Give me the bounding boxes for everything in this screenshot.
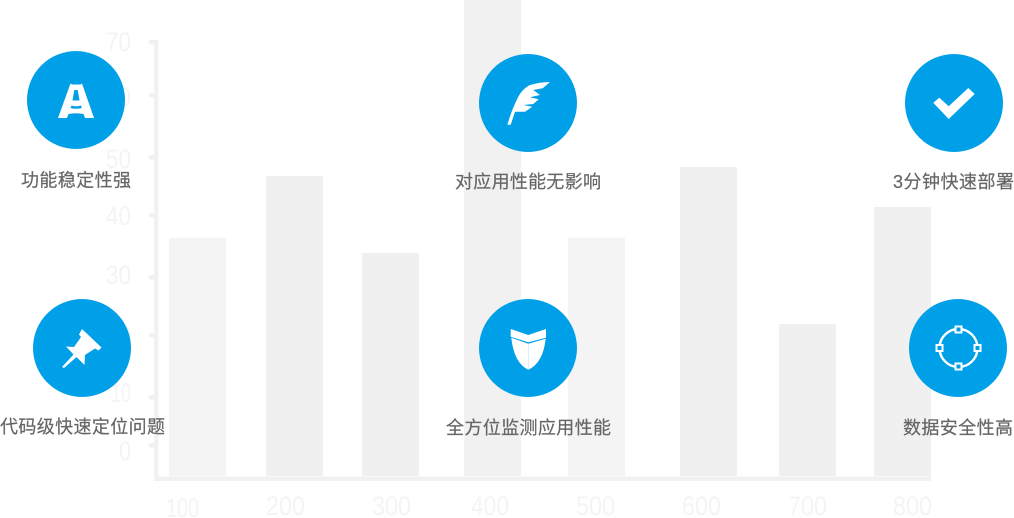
label: 代码级快速定位问题	[0, 417, 165, 437]
y axis labels	[106, 27, 131, 466]
y axis labels: 40	[106, 201, 131, 231]
y axis labels: 10	[111, 378, 131, 408]
label: 3分钟快速部署	[893, 172, 1014, 192]
y axis labels: 60	[106, 82, 131, 112]
icon: push pin	[33, 299, 131, 397]
y axis labels: 70	[106, 27, 131, 57]
icon: circle nodes	[909, 299, 1007, 397]
label: 功能稳定性强	[21, 170, 131, 190]
icon: shield	[479, 299, 577, 397]
icon: check mark	[905, 54, 1003, 152]
y axis labels: 20	[106, 320, 131, 350]
y axis labels: 50	[106, 144, 131, 174]
icon: feather	[479, 54, 577, 152]
label: 全方位监测应用性能	[446, 418, 611, 438]
icon: tower letter A	[27, 51, 125, 149]
feature: data security	[903, 299, 1013, 438]
feature: fast deployment	[893, 54, 1014, 192]
feature: full monitoring	[446, 299, 611, 438]
feature: code-level diagnosis	[0, 299, 165, 437]
label: 对应用性能无影响	[455, 172, 601, 192]
bars	[169, 0, 931, 476]
y axis labels: 30	[106, 260, 131, 290]
label: 数据安全性高	[903, 418, 1013, 438]
y axis	[149, 40, 158, 481]
feature: stability	[21, 51, 131, 190]
y axis labels: 0	[119, 436, 131, 466]
x axis labels	[166, 491, 932, 518]
feature: no performance impact	[455, 54, 601, 192]
x axis	[154, 476, 931, 481]
